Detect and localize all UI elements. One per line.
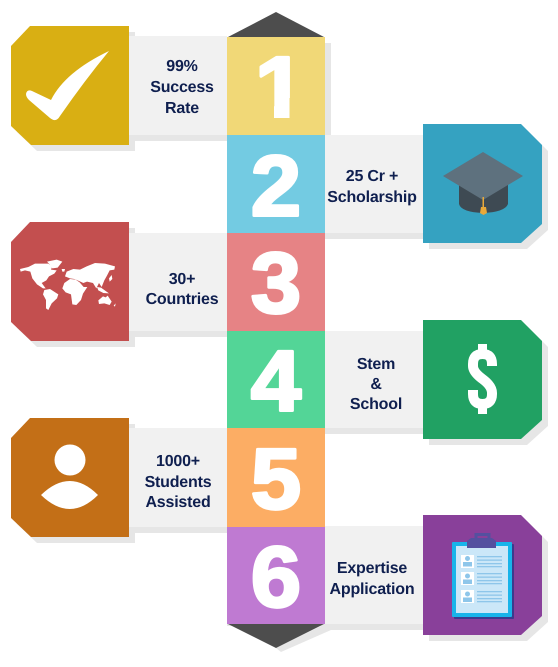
number block 5 [227, 428, 325, 528]
label: 99% Success Rate: 99% [166, 58, 198, 75]
row 6: expertise application [227, 515, 548, 641]
label panel 5 [129, 428, 227, 533]
number block 5: 5 [251, 432, 301, 528]
icon: dollar sign [473, 344, 492, 414]
label: 1000+ Students Assisted: 1000+ [156, 453, 200, 470]
icon tile 2 [423, 124, 542, 243]
number block 3 [227, 233, 325, 332]
label: 99% Success Rate: Success [150, 79, 214, 96]
icon shadow 4 [429, 326, 548, 445]
label: Stem & School: Stem [357, 356, 395, 373]
label panel 3 [129, 233, 227, 337]
label: 25 Cr + Scholarship: Scholarship [327, 189, 417, 206]
icon tile 5 [11, 418, 129, 537]
icon tile 4 [423, 320, 542, 439]
number block 6: 6 [251, 530, 301, 626]
label: 1000+ Students Assisted: Students [145, 474, 212, 491]
number block 2 [227, 135, 325, 234]
row 5: students assisted [11, 418, 325, 543]
label: 99% Success Rate: Rate [165, 100, 199, 117]
icon tile 1 [11, 26, 129, 145]
number block 6 [227, 527, 325, 626]
number block 1 [227, 37, 325, 136]
bottom arrow cap [228, 624, 324, 648]
row 4: stem and school [227, 320, 548, 445]
icon: world map [20, 260, 116, 310]
label panel 6 [325, 526, 423, 630]
label: 30+ Countries: 30+ [169, 271, 195, 288]
icon: check mark [26, 51, 109, 120]
number block 3: 3 [251, 236, 301, 332]
label: Expertise Application: Application [330, 581, 414, 598]
icon shadow 3 [17, 228, 135, 347]
column shadow [227, 43, 331, 652]
label panel 2 [325, 135, 423, 239]
number block 2: 2 [251, 138, 301, 234]
icon shadow 5 [17, 424, 135, 543]
number block 4: 4 [251, 334, 301, 430]
label: 1000+ Students Assisted: Assisted [145, 494, 211, 511]
label: Stem & School: School [350, 396, 402, 413]
top arrow cap [228, 12, 324, 37]
icon: clipboard [452, 534, 514, 619]
icon: graduation cap [443, 152, 523, 215]
icon shadow 1 [17, 32, 135, 151]
icon tile 3 [11, 222, 129, 341]
label: Stem & School: & [370, 376, 382, 393]
label panel 4 [325, 331, 423, 434]
row 2: scholarship [227, 124, 548, 249]
label: Expertise Application: Expertise [337, 560, 407, 577]
number block 1: 1 [255, 40, 305, 136]
icon tile 6 [423, 515, 542, 635]
icon: person [41, 444, 98, 509]
row 1: success rate [11, 26, 325, 151]
icon shadow 6 [429, 521, 548, 641]
label panel 1 [129, 36, 227, 141]
number block 4 [227, 331, 325, 430]
label: 30+ Countries: Countries [146, 291, 219, 308]
label: 25 Cr + Scholarship: 25 Cr + [346, 168, 398, 185]
icon shadow 2 [429, 130, 548, 249]
row 3: countries [11, 222, 325, 347]
